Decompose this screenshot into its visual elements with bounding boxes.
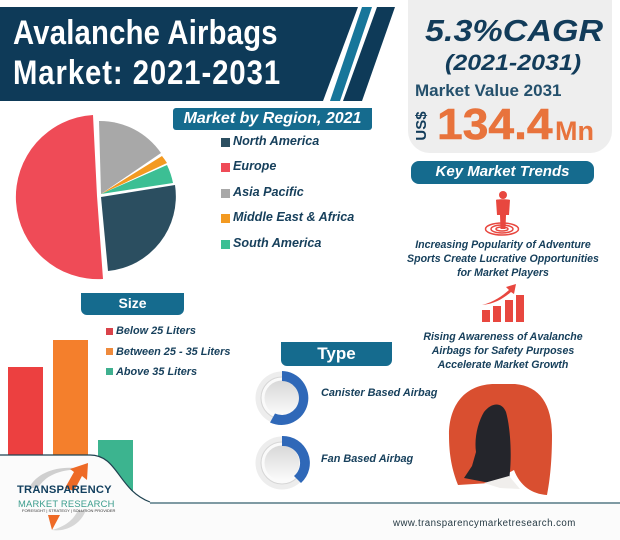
text: trend two: Rising Awareness of Avalanche [423, 331, 583, 343]
legend: regions: North America [233, 134, 319, 148]
legend: size: Below 25 Liters [116, 325, 196, 337]
CAGR period: (2021-2031) [445, 50, 581, 75]
footer band [0, 454, 620, 505]
icon: rising bar chart [482, 284, 524, 322]
label: fan based airbag: Fan Based Airbag [321, 453, 413, 465]
market value figure: 134.4 [437, 100, 553, 149]
text: trend two [423, 331, 583, 371]
text: trend one [407, 239, 599, 279]
legend: size: Above 35 Liters [116, 366, 197, 378]
legend: size: Between 25 - 35 Liters [116, 346, 230, 358]
market value figure: Mn [555, 116, 594, 146]
market value label: Market Value 2031 [415, 81, 561, 100]
website url: www.transparencymarketresearch.com [393, 518, 576, 529]
logo: FORESIGHT | STRATEGY | SOLUTION PROVIDER [22, 508, 115, 513]
panel: CAGR and market value [408, 0, 612, 153]
legend: size [106, 325, 230, 378]
heading: Type [281, 342, 392, 366]
text: trend one: Sports Create Lucrative Opportunities [407, 253, 599, 265]
pie chart [16, 115, 176, 280]
donut: fan based airbag [256, 436, 310, 490]
legend: regions: South America [233, 236, 321, 250]
heading: Market by Region: Market by Region, 2021 [184, 110, 361, 127]
heading: Type: Type [317, 344, 356, 363]
legend: regions: Europe [233, 159, 276, 173]
CAGR figure: 5.3%CAGR [425, 13, 603, 48]
legend: regions: Asia Pacific [233, 185, 304, 199]
text: trend one: for Market Players [457, 267, 549, 279]
heading: Size: Size [118, 295, 146, 311]
bar chart: size [8, 340, 133, 490]
title banner: Avalanche Airbags [13, 14, 278, 52]
illustration: avalanche airbag [448, 384, 552, 495]
donut: canister based airbag [256, 371, 308, 425]
title banner: Market: 2021-2031 [13, 54, 281, 92]
logo [17, 463, 116, 530]
label: canister based airbag: Canister Based Airbag [321, 387, 437, 399]
text: trend one: Increasing Popularity of Adventure [415, 239, 591, 251]
text: trend two: Accelerate Market Growth [438, 359, 568, 371]
icon: person on target [484, 191, 520, 236]
legend: regions: Middle East & Africa [233, 210, 354, 224]
title banner [0, 7, 395, 101]
legend: regions [221, 134, 354, 250]
text: trend two: Airbags for Safety Purposes [432, 345, 574, 357]
market value figure: US$ [413, 111, 430, 141]
heading: Size [81, 293, 184, 315]
heading: Key Market Trends: Key Market Trends [436, 163, 569, 180]
logo: MARKET RESEARCH [18, 498, 115, 509]
heading: Key Market Trends [411, 161, 594, 184]
market value figure [413, 100, 594, 149]
heading: Market by Region [173, 108, 372, 130]
logo: TRANSPARENCY [17, 484, 112, 496]
